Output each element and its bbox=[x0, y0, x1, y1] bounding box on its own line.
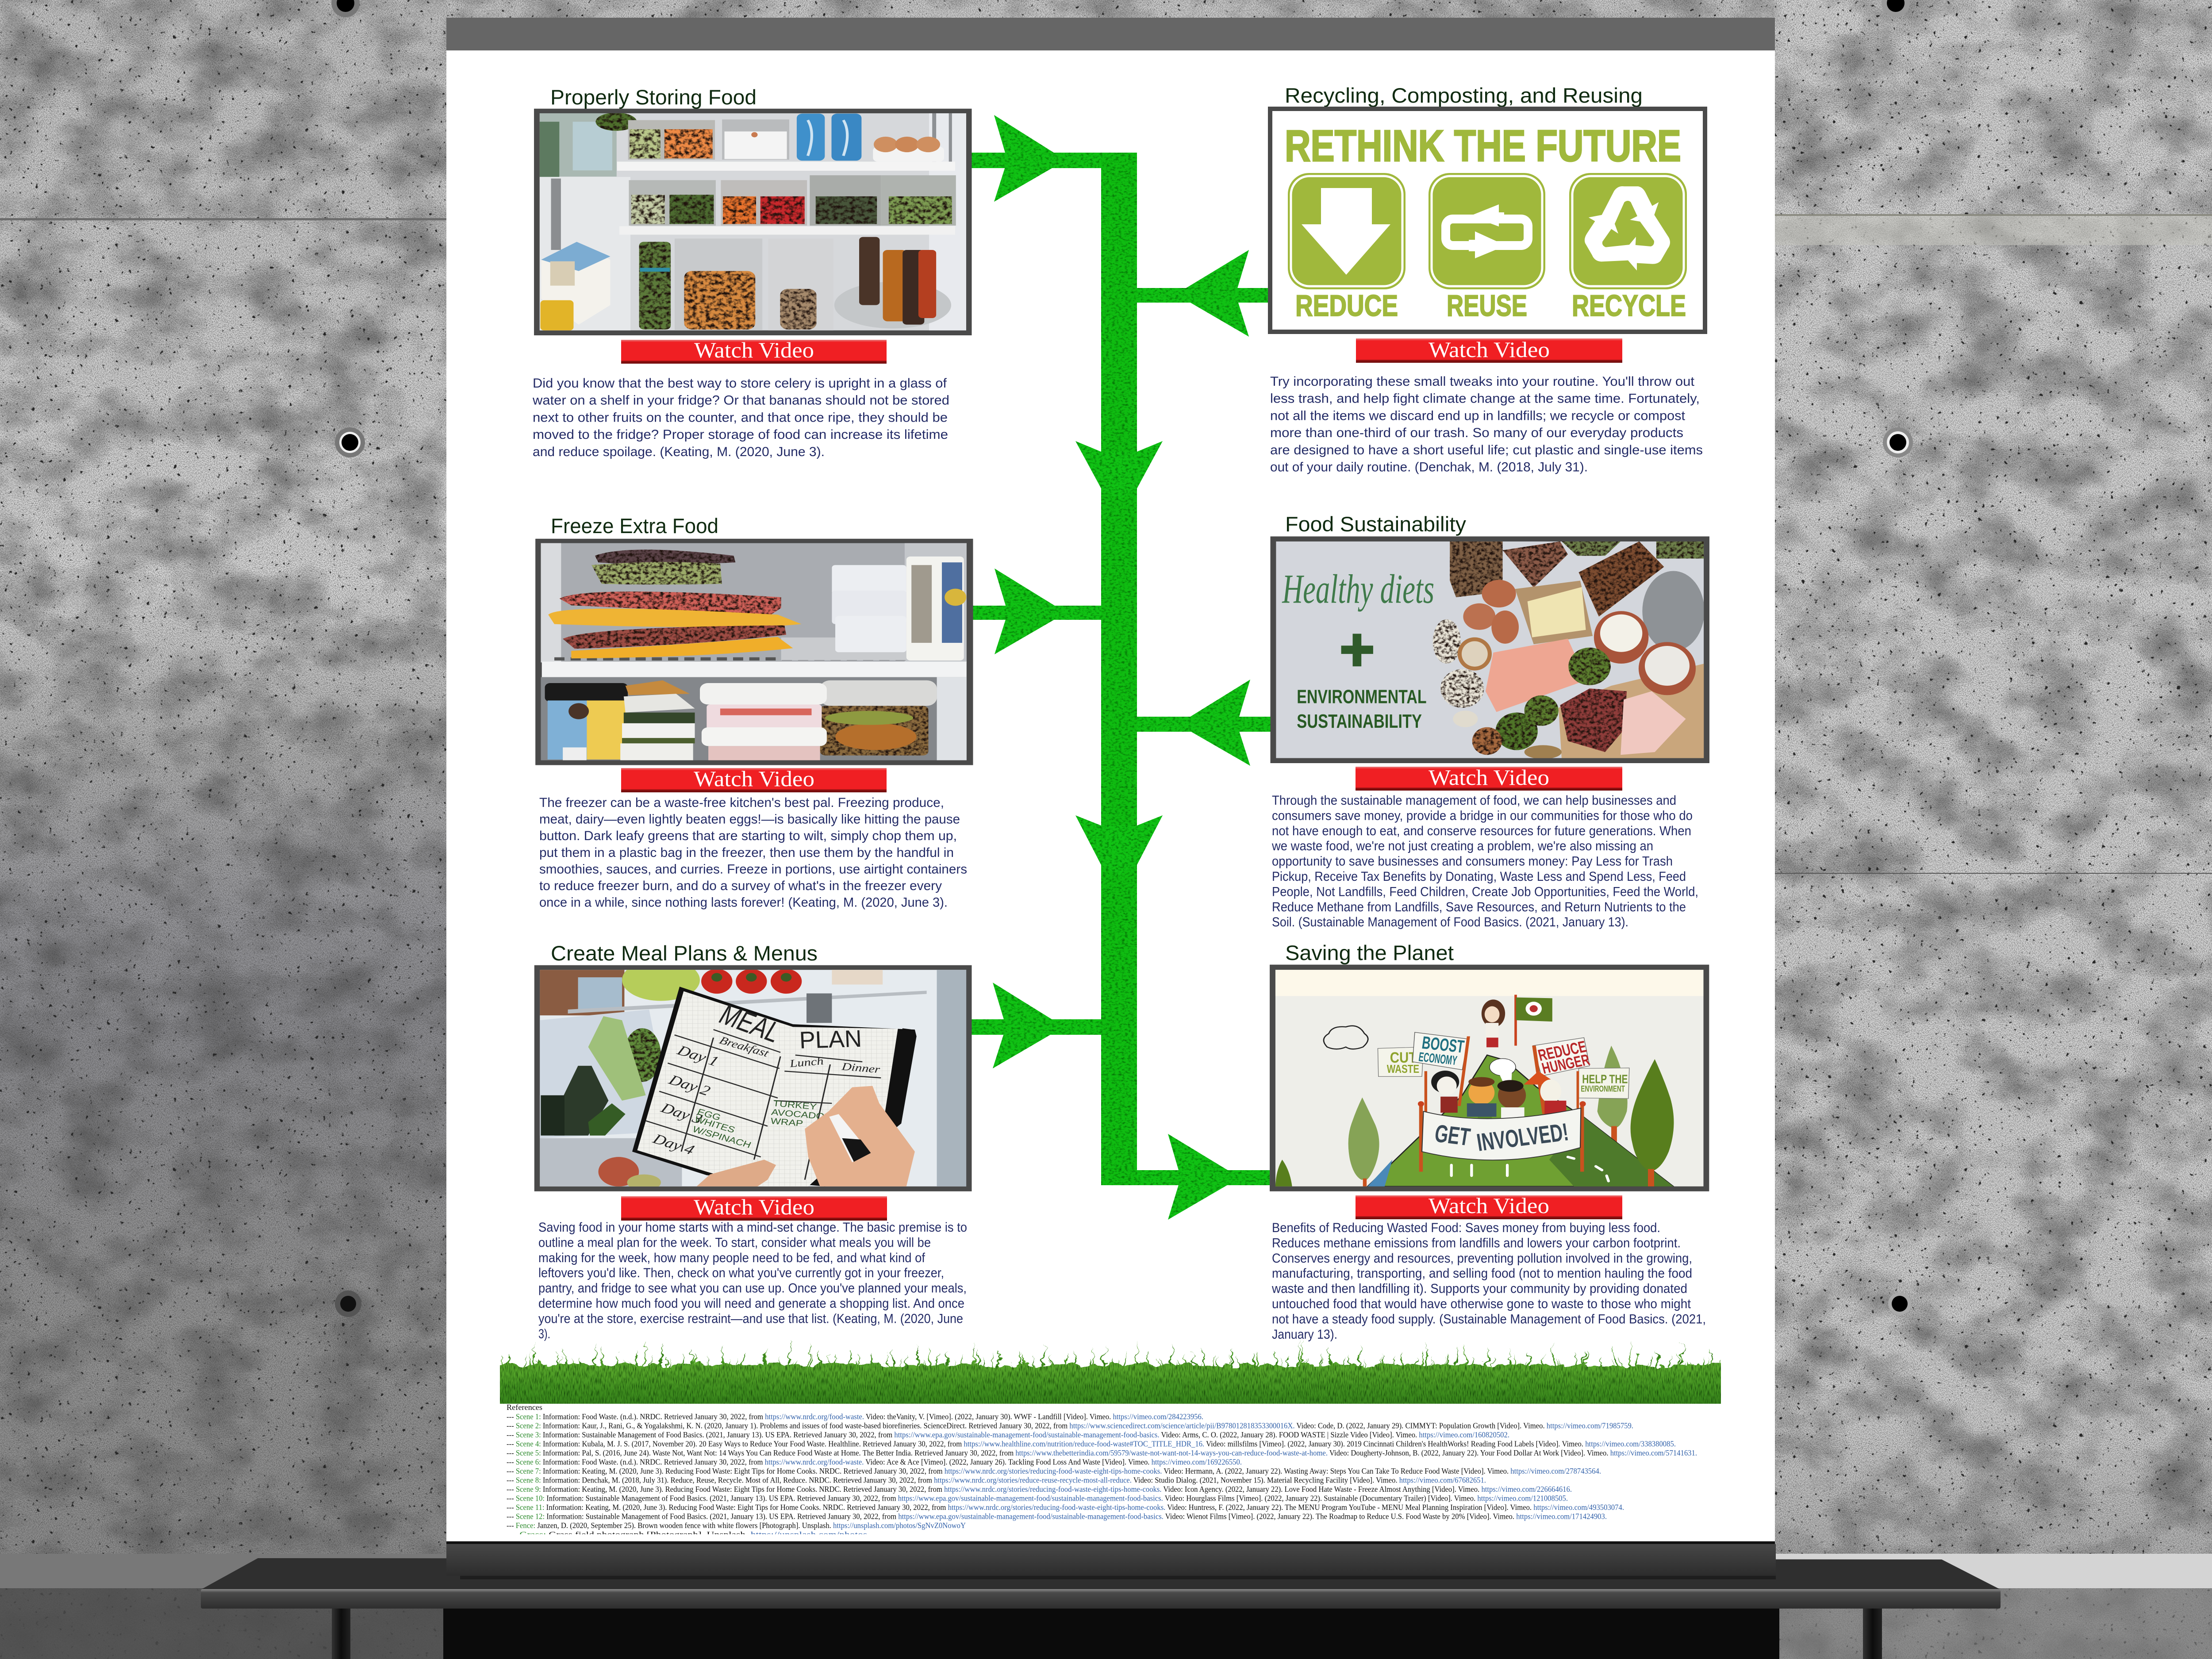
body text: saving the planet: Reduces methane emissions from landfills and lowers your carbon footprint. bbox=[1272, 1236, 1681, 1250]
photo: meal plan notebook bbox=[534, 959, 972, 1191]
body text: determine how much food you will need and generate a shopping list. And once bbox=[538, 1296, 964, 1311]
poster bottom bar bbox=[446, 1541, 1776, 1579]
body text bbox=[1270, 374, 1703, 474]
body text: to reduce freezer burn, and do a survey of what's in the freezer every bbox=[539, 879, 942, 893]
body text: consumers save money, provide a bridge in our communities for those who do bbox=[1272, 808, 1693, 823]
body text: making for the week, how many people need to be fed, and what kind of bbox=[538, 1251, 926, 1265]
photo: meal plan notebook: Day 3 bbox=[658, 1100, 705, 1127]
heading: Food Sustainability bbox=[1285, 512, 1467, 536]
panel: saving the planet bbox=[1270, 941, 1709, 1219]
watch video button: Watch Video bbox=[1429, 765, 1549, 790]
panel: food sustainability bbox=[1271, 512, 1709, 929]
illustration: get involved: HELP THE bbox=[1582, 1073, 1628, 1086]
photo: freezer bbox=[536, 539, 973, 765]
body text: once in a while, since nothing lasts forever! (Keating, M. (2020, June 3). bbox=[539, 895, 948, 910]
photo: healthy diets and food bbox=[1271, 536, 1709, 763]
body text: out of your daily routine. (Denchak, M. (2018, July 31). bbox=[1270, 460, 1588, 474]
body text: saving the planet: January 13). bbox=[1272, 1327, 1337, 1342]
body text: you're at the store, exercise restraint—and use that list. (Keating, M. (2020, June bbox=[538, 1311, 963, 1326]
arrow: freeze bbox=[973, 568, 1101, 654]
heading: Properly Storing Food bbox=[550, 85, 757, 109]
body text: saving the planet: Benefits of Reducing Wasted Food: Saves money from buying less food. bbox=[1272, 1221, 1660, 1235]
photo: healthy diets and food: SUSTAINABILITY bbox=[1297, 710, 1422, 732]
photo: meal plan notebook: MEAL bbox=[714, 998, 787, 1048]
graphic: rethink the future bbox=[1270, 109, 1705, 332]
body text: pantry, and fridge to see what you can use up. Once you've planned your meals, bbox=[538, 1281, 967, 1296]
green arrow network bbox=[972, 115, 1271, 1220]
photo: organised fridge bbox=[534, 109, 972, 335]
references: --- Scene 6: Information: Food Waste. (n.d.). NRDC. Retrieved January 30, 2022, from https://www.nrdc.org/food-waste. Video: Ace & Ace [Vimeo]. (2022, January 26). Tackling Food Loss And Waste [Video]. Vimeo. https://vimeo.com/169226550. bbox=[507, 1457, 1242, 1466]
references: References bbox=[507, 1403, 542, 1412]
body text: Reduce Methane from Landfills, Save Resources, and Return Nutrients to the bbox=[1272, 900, 1686, 914]
body text: water on a shelf in your fridge? Or that bananas should not be stored bbox=[532, 393, 949, 408]
body text: leftovers you'd like. Then, check on what you've currently got in your freezer, bbox=[538, 1266, 944, 1280]
body text: saving the planet: waste and then landfilling it). Supports your community by providing donated bbox=[1271, 1282, 1687, 1296]
body text: meat, dairy—even lightly beaten eggs!—is basically like hitting the pause bbox=[539, 812, 960, 827]
references: --- Scene 9: Information: Keating, M. (2020, June 3). Reducing Food Waste: Eight Tips for Home Cooks. NRDC. Retrieved January 30, 2022, from https://www.nrdc.org/stories/reducing-food-waste-eight-tips-home-cooks. Video: Icon Agency. (2022, January 22). Love Food Hate Waste - Freeze Almost Anything [Video]. Vimeo. https://vimeo.com/226664616. bbox=[507, 1485, 1572, 1494]
watch video button: Watch Video bbox=[694, 338, 814, 362]
body text: Try incorporating these small tweaks into your routine. You'll throw out bbox=[1270, 374, 1695, 389]
panel: create meal plans and menus bbox=[534, 941, 972, 1341]
body text bbox=[538, 1220, 967, 1341]
body text: saving the planet: untouched food that would have otherwise gone to waste to those who might bbox=[1272, 1297, 1691, 1311]
body text: are designed to have a short useful life; cut plastic and single-use items bbox=[1270, 443, 1703, 457]
heading: Saving the Planet bbox=[1285, 941, 1454, 964]
watch video button: Watch Video bbox=[1429, 1193, 1549, 1218]
body text: we waste food, we're not just creating a problem, we're also missing an bbox=[1271, 839, 1653, 853]
body text: Did you know that the best way to store celery is upright in a glass of bbox=[533, 376, 947, 391]
heading: Create Meal Plans & Menus bbox=[551, 941, 818, 965]
references: --- Fence: Janzen, D. (2020, September 25). Brown wooden fence with white flowers [Photograph]. Unsplash. https://unsplash.com/photos/SgNvZ0NowoY bbox=[507, 1521, 966, 1530]
arrow: meal plans bbox=[972, 983, 1101, 1068]
body text bbox=[532, 376, 949, 459]
body text: next to other fruits on the counter, and that once ripe, they should be bbox=[533, 410, 948, 425]
graphic: rethink the future: REDUCE bbox=[1295, 289, 1398, 323]
body text: moved to the fridge? Proper storage of food can increase its lifetime bbox=[533, 427, 948, 442]
heading: Recycling, Composting, and Reusing bbox=[1285, 84, 1643, 107]
body text: The freezer can be a waste-free kitchen's best pal. Freezing produce, bbox=[539, 795, 944, 810]
references: --- Scene 2: Information: Kaur, J., Rani, G., & Yogalakshmi, K. N. (2020, January 1). Problems and issues of food waste-based biorefineries. ScienceDirect. Retrieved January 30, 2022, from https://www.sciencedirect.com/science/article/pii/B978012818353300016X. Video: Code, D. (2022, January 29). CIMMYT: Population Growth [Video]. Vimeo. https://vimeo.com/71985759. bbox=[507, 1421, 1633, 1430]
photo: meal plan notebook: W/SPINACH bbox=[691, 1124, 753, 1150]
body text: not all the items we discard end up in landfills; we recycle or compost bbox=[1270, 408, 1686, 423]
illustration: get involved: WASTE bbox=[1387, 1063, 1419, 1075]
body text: not have enough to eat, and conserve resources for future generations. When bbox=[1272, 824, 1691, 838]
references: --- Scene 3: Information: Sustainable Management of Food Basics. (2021, January 13). US EPA. Retrieved January 30, 2022, from https://www.epa.gov/sustainable-management-food/sustainable-management-food-basics. Video: Arms, C. O. (2022, January 28). FOOD WASTE | Sizzle Video [Video]. Vimeo. https://vimeo.com/160820502. bbox=[507, 1430, 1509, 1439]
graphic: rethink the future: REUSE bbox=[1447, 289, 1527, 323]
arrow: recycling bbox=[1137, 250, 1268, 337]
photo: meal plan notebook: TURKEY bbox=[772, 1098, 818, 1112]
icon: recycle bbox=[1569, 173, 1687, 289]
photo: meal plan notebook: WHITES bbox=[693, 1114, 737, 1135]
illustration: get involved: INVOLVED! bbox=[1475, 1118, 1571, 1156]
body text: saving the planet: Conserves energy and resources, preventing pollution involved in the growing, bbox=[1272, 1251, 1692, 1266]
illustration: get involved: CUT bbox=[1390, 1049, 1417, 1066]
body text bbox=[1271, 793, 1698, 929]
body text: saving the planet: manufacturing, transporting, and selling food (not to mention hauling the food bbox=[1272, 1266, 1692, 1281]
body text: outline a meal plan for the week. To start, consider what meals you will be bbox=[538, 1235, 931, 1250]
references: --- Scene 7: Information: Keating, M. (2020, June 3). Reducing Food Waste: Eight Tips for Home Cooks. NRDC. Retrieved January 30, 2022, from https://www.nrdc.org/stories/reducing-food-waste-eight-tips-home-cooks. Video: Hermann, A. (2022, January 22). Wasting Away: Steps You Can Take To Reduce Food Waste [Video]. Vimeo. https://vimeo.com/278743564. bbox=[507, 1467, 1601, 1475]
down arrow upper bbox=[1075, 441, 1163, 500]
photo: meal plan notebook: Dinner bbox=[841, 1060, 881, 1075]
central vertical trunk bbox=[1101, 153, 1137, 1185]
graphic: rethink the future: RECYCLE bbox=[1572, 289, 1686, 323]
photo: healthy diets and food: Healthy diets bbox=[1282, 566, 1434, 612]
icon: reduce bbox=[1288, 173, 1406, 289]
illustration: get involved: ENVIRONMENT bbox=[1581, 1084, 1625, 1094]
body text: less trash, and help fight climate change at the same time. Fortunately, bbox=[1270, 392, 1700, 406]
body text: put them in a plastic bag in the freezer, then use them by the handful in bbox=[539, 845, 954, 860]
body text: saving the planet bbox=[1271, 1221, 1706, 1342]
photo: meal plan notebook: Day 1 bbox=[674, 1042, 722, 1069]
references: --- Scene 4: Information: Kubala, M. J. S. (2017, November 20). 20 Easy Ways to Reduce Your Food Waste. Healthline. Retrieved January 30, 2022, from https://www.healthline.com/nutrition/reduce-food-waste#TOC_TITLE_HDR_16. Video: millsfilms [Vimeo]. (2022, January 30). 2019 Cincinnati Children's HealthWorks! Reading Food Labels [Video]. Vimeo. https://vimeo.com/338380085. bbox=[507, 1440, 1676, 1448]
panel: recycling, composting and reusing bbox=[1270, 84, 1705, 474]
arrow: food sustainability bbox=[1137, 680, 1271, 766]
illustration: get involved: REDUCE bbox=[1536, 1037, 1588, 1064]
photo: meal plan notebook: Lunch bbox=[788, 1055, 824, 1069]
photo: healthy diets and food: ENVIRONMENTAL bbox=[1297, 686, 1427, 707]
references: --- Scene 10: Information: Sustainable Management of Food Basics. (2021, January 13). US EPA. Retrieved January 30, 2022, from https://www.epa.gov/sustainable-management-food/sustainable-management-food-basics. Video: Hourglass Films [Vimeo]. (2022, January 22). Sustainable (Documentary Trailer) [Video]. Vimeo. https://vimeo.com/121008505. bbox=[507, 1494, 1568, 1502]
references: --- Scene 5: Information: Pal, S. (2016, June 24). Waste Not, Want Not: 14 Ways You Can Reduce Food Waste at Home. The Better India. Retrieved January 30, 2022, from https://www.thebetterindia.com/59579/waste-not-want-not-14-ways-you-can-reduce-food-waste-at-home. Video: Dougherty-Johnson, B. (2022, January 22). Your Food Dollar At Work [Video]. Vimeo. https://vimeo.com/57141631. bbox=[507, 1448, 1697, 1457]
body text: saving the planet: not have a steady food supply. (Sustainable Management of Food Basics. (2021, bbox=[1272, 1312, 1706, 1326]
references bbox=[507, 1403, 1697, 1539]
graphic: rethink the future: RETHINK THE FUTURE bbox=[1285, 121, 1681, 171]
body text: Soil. (Sustainable Management of Food Basics. (2021, January 13). bbox=[1272, 915, 1628, 929]
references: --- Scene 12: Information: Sustainable Management of Food Basics. (2021, January 13). US EPA. Retrieved January 30, 2022, from https://www.epa.gov/sustainable-management-food/sustainable-management-food-basics. Video: Wienot Films [Vimeo]. (2022, January 22). The Roadmap to Reduce U.S. Food Waste by 20% [Video]. Vimeo. https://vimeo.com/171424903. bbox=[507, 1512, 1607, 1521]
photo: meal plan notebook: AVOCADO bbox=[771, 1107, 825, 1121]
watch video button: Watch Video bbox=[1429, 337, 1550, 362]
body text: Saving food in your home starts with a mind-set change. The basic premise is to bbox=[538, 1220, 967, 1235]
photo: meal plan notebook: Breakfast bbox=[718, 1034, 772, 1059]
watch video button: Watch Video bbox=[694, 1194, 814, 1219]
arrow: storing food bbox=[972, 115, 1101, 202]
body text: opportunity to save businesses and consumers money: Pay Less for Trash bbox=[1272, 854, 1673, 869]
photo: meal plan notebook: EGG bbox=[695, 1107, 722, 1122]
body text: smoothies, sauces, and curries. Freeze in portions, use airtight containers bbox=[539, 862, 967, 876]
body text: 3). bbox=[538, 1327, 550, 1341]
photo: meal plan notebook: WRAP bbox=[770, 1116, 804, 1128]
panel: properly storing food bbox=[532, 85, 972, 459]
arrow: saving the planet bbox=[1137, 1134, 1270, 1220]
icon: reuse bbox=[1429, 173, 1545, 289]
photo: meal plan notebook: PLAN bbox=[799, 1025, 862, 1054]
watch video button bbox=[621, 766, 887, 792]
illustration: get involved: BOOST bbox=[1421, 1033, 1466, 1057]
grass strip bbox=[478, 1329, 1743, 1420]
illustration: get involved: HUNGER bbox=[1540, 1051, 1592, 1077]
watch video button bbox=[621, 338, 887, 364]
shelf and stand bbox=[201, 1558, 2001, 1659]
watch video button: Watch Video bbox=[694, 766, 814, 791]
body text: and reduce spoilage. (Keating, M. (2020, June 3). bbox=[533, 445, 825, 459]
photo: meal plan notebook: Day 4 bbox=[650, 1130, 697, 1158]
references: --- Scene 1: Information: Food Waste. (n.d.). NRDC. Retrieved January 30, 2022, from https://www.nrdc.org/food-waste. Video: theVanity, V. [Vimeo]. (2022, January 30). WWF - Landfill [Video]. Vimeo. https://vimeo.com/284223956. bbox=[507, 1412, 1203, 1421]
watch video button bbox=[1356, 1193, 1622, 1219]
top bar of poster bbox=[446, 18, 1775, 50]
panel: freeze extra food bbox=[536, 514, 973, 910]
body text: button. Dark leafy greens that are starting to wilt, simply chop them up, bbox=[539, 829, 957, 843]
references: --- Grass: Grass field photograph [Photograph]. Unsplash. https://unsplash.com/photos bbox=[507, 1530, 867, 1539]
watch video button bbox=[1356, 765, 1622, 791]
references: --- Scene 11: Information: Keating, M. (2020, June 3). Reducing Food Waste: Eight Tips for Home Cooks. NRDC. Retrieved January 30, 2022, from https://www.nrdc.org/stories/reducing-food-waste-eight-tips-home-cooks. Video: Huntress, F. (2022, January 22). The MENU Program YouTube - MENU Meal Planning Inspiration [Video]. Vimeo. https://vimeo.com/493503074. bbox=[507, 1503, 1624, 1512]
illustration: get involved bbox=[1270, 965, 1709, 1191]
illustration: get involved: ECONOMY bbox=[1418, 1050, 1458, 1068]
body text: People, Not Landfills, Feed Children, Create Job Opportunities, Feed the World, bbox=[1272, 884, 1698, 899]
body text: Through the sustainable management of food, we can help businesses and bbox=[1272, 793, 1676, 808]
body text bbox=[539, 795, 967, 910]
watch video button bbox=[621, 1194, 887, 1221]
watch video button bbox=[1356, 337, 1622, 363]
illustration: get involved: GET bbox=[1433, 1120, 1472, 1151]
references: --- Scene 8: Information: Denchak, M. (2018, July 31). Reduce, Reuse, Recycle. Most of All, Reduce. NRDC. Retrieved January 30, 2022, from https://www.nrdc.org/stories/reduce-reuse-recycle-most-all-reduce. Video: Studio Dialog. (2021, November 15). Material Recycling Facility [Video]. Vimeo. https://vimeo.com/67682651. bbox=[507, 1476, 1486, 1485]
body text: Pickup, Receive Tax Benefits by Donating, Waste Less and Spend Less, Feed bbox=[1272, 869, 1686, 884]
photo: meal plan notebook: Day 2 bbox=[666, 1071, 713, 1099]
body text: more than one-third of our trash. So many of our everyday products bbox=[1270, 426, 1683, 440]
poster sheet bbox=[446, 18, 1775, 1543]
down arrow lower bbox=[1075, 815, 1163, 876]
heading: Freeze Extra Food bbox=[551, 514, 718, 538]
